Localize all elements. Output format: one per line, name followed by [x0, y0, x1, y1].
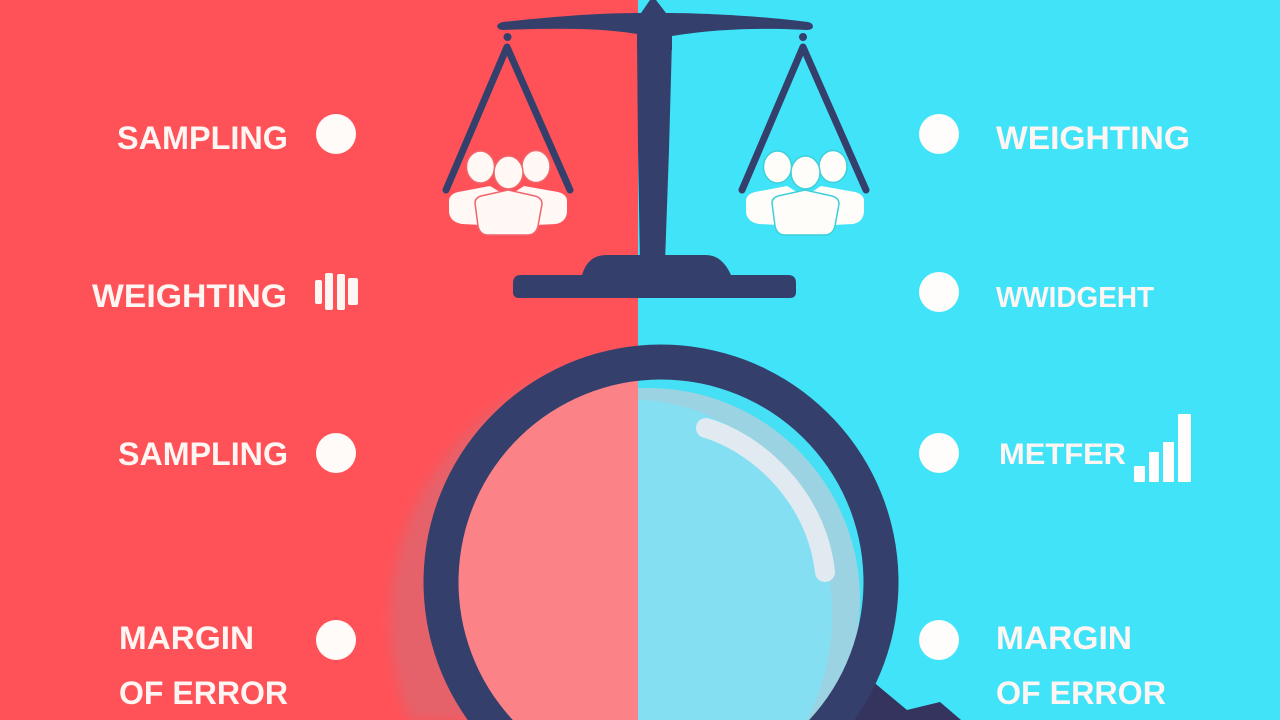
label: of error: OF ERROR [996, 675, 1166, 711]
icon: left group of people [449, 150, 567, 235]
label: garbled word: WWIDGEHT [996, 282, 1154, 314]
label: of error: OF ERROR [119, 675, 288, 711]
marker dot [316, 114, 356, 154]
lens grey crescent [638, 388, 860, 720]
marker dot [919, 114, 959, 154]
icon: signal bars [315, 273, 358, 310]
panel: cyan right side [638, 0, 1280, 720]
lens red half [458, 380, 638, 720]
left labels [92, 114, 358, 711]
icon: right group of people [746, 150, 864, 235]
balance scale [446, 0, 866, 298]
lens highlight [706, 428, 825, 572]
label: weighting: WEIGHTING [996, 120, 1190, 156]
label: weighting: WEIGHTING [92, 278, 287, 314]
left pan hanger [446, 34, 570, 190]
scale base [513, 255, 796, 298]
label: margin: MARGIN [996, 620, 1132, 656]
label: sampling: SAMPLING [117, 120, 288, 156]
right labels [919, 114, 1191, 711]
panel: red left side [0, 0, 638, 720]
label: metfer: METFER [999, 438, 1126, 471]
marker dot [316, 620, 356, 660]
marker dot [316, 433, 356, 473]
marker dot [919, 433, 959, 473]
label: sampling: SAMPLING [118, 436, 288, 472]
lens ring [424, 345, 898, 720]
scale beam [497, 0, 813, 50]
icon: rising bars [1134, 414, 1191, 482]
handle [800, 670, 961, 720]
scale post [637, 40, 672, 262]
label: margin: MARGIN [119, 620, 254, 656]
lens cyan rim [638, 379, 864, 720]
lens shadow [388, 384, 528, 720]
marker dot [919, 620, 959, 660]
magnifying glass [390, 345, 961, 720]
right pan hanger [742, 34, 866, 190]
lens cyan half [638, 400, 832, 720]
marker dot [919, 272, 959, 312]
